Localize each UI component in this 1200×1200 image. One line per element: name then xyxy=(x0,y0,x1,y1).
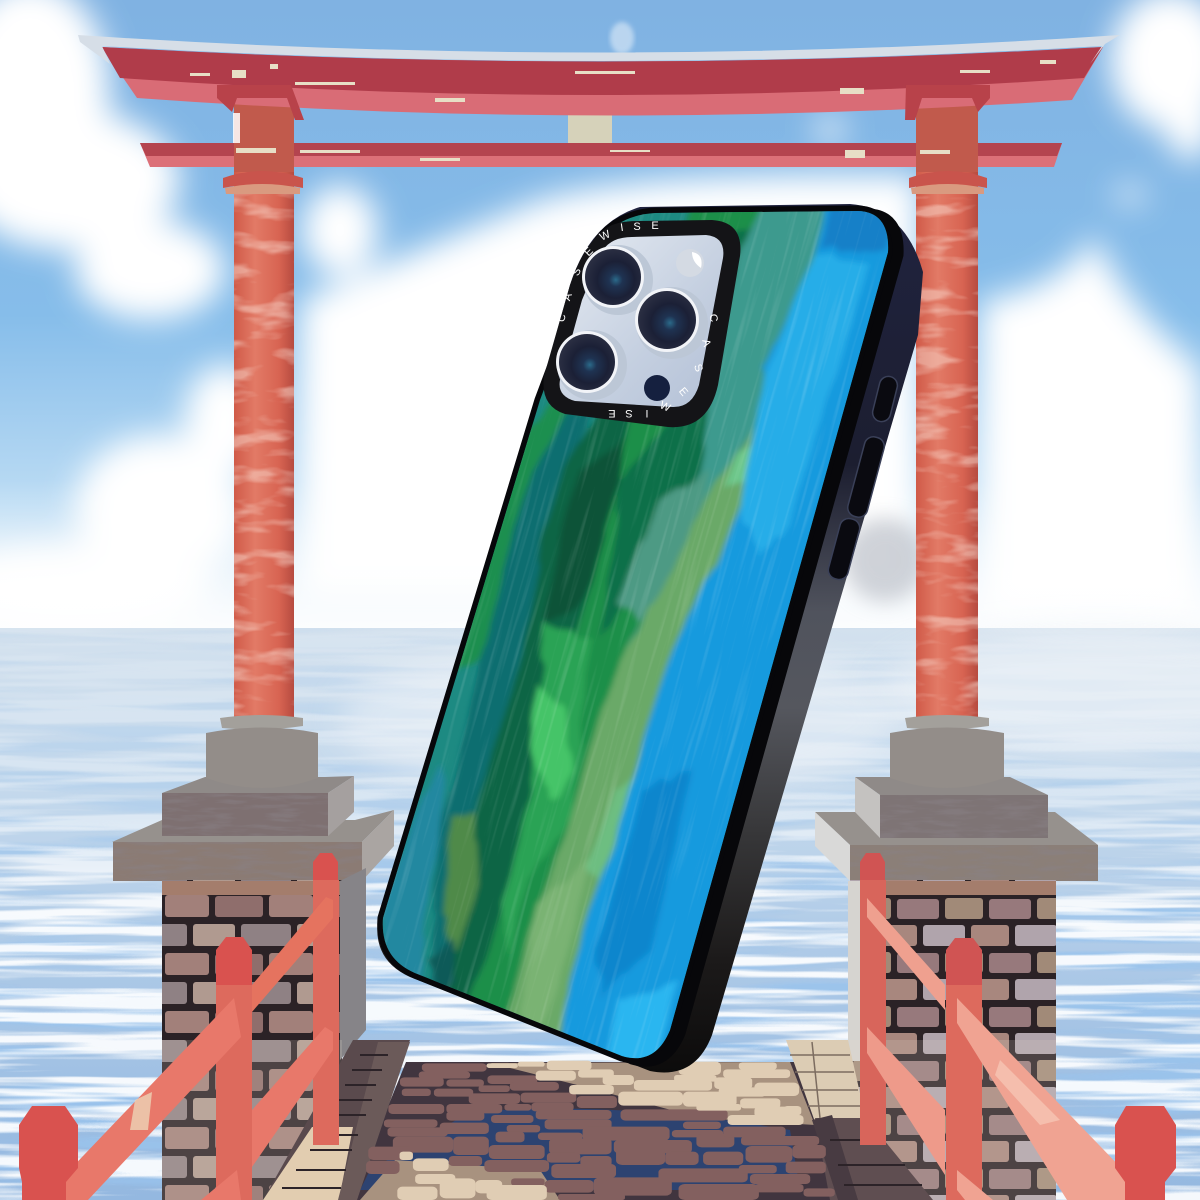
roof edge xyxy=(78,35,1120,64)
wet paving base xyxy=(350,1062,850,1200)
brand lettering: S xyxy=(570,266,584,278)
upper beam xyxy=(102,47,1103,116)
left stone base xyxy=(112,715,394,881)
sensor xyxy=(644,375,670,401)
puddles xyxy=(360,1109,800,1190)
right railing xyxy=(860,853,1176,1200)
left pillar xyxy=(233,100,294,718)
brand lettering: A xyxy=(699,338,713,349)
side buttons xyxy=(826,375,899,582)
lower left blue-teal xyxy=(380,760,441,990)
camera module xyxy=(543,220,740,427)
brand lettering: E xyxy=(676,385,690,399)
left curb xyxy=(263,1040,410,1200)
brand lettering xyxy=(555,220,720,419)
case body and bumper xyxy=(377,204,923,1072)
lens: top xyxy=(582,245,653,315)
brand lettering: I xyxy=(620,222,624,234)
lower rail xyxy=(867,1027,945,1175)
sage stripe xyxy=(504,428,758,1034)
right stone base xyxy=(815,715,1098,881)
brand lettering: E xyxy=(608,407,616,419)
clouds xyxy=(0,0,1200,635)
sunlit paving xyxy=(490,1062,815,1125)
brand lettering: C xyxy=(706,313,720,323)
lower rail, near part xyxy=(957,1170,993,1200)
near post xyxy=(946,938,982,1200)
black inner rim xyxy=(383,211,898,1061)
brand lettering: I xyxy=(645,407,649,419)
torii gate xyxy=(78,35,1120,718)
brand lettering: S xyxy=(633,221,641,233)
lower rail, near part xyxy=(201,1170,241,1200)
top rail, near part xyxy=(957,998,1128,1200)
central strut xyxy=(568,104,612,144)
brand lettering: E xyxy=(651,220,659,232)
sky xyxy=(0,0,1200,630)
far post xyxy=(860,853,886,1145)
near post xyxy=(216,937,252,1200)
upper teal stripe xyxy=(694,211,827,500)
end post xyxy=(19,1106,78,1200)
brand lettering: A xyxy=(561,291,575,302)
olive patches xyxy=(440,815,477,950)
dark teal stripe xyxy=(430,410,590,985)
lens: right xyxy=(635,287,708,359)
green stripe xyxy=(468,212,762,1011)
blue stripe xyxy=(555,195,900,1070)
canvas texture xyxy=(384,211,874,1058)
top rail, far part xyxy=(252,897,333,1012)
brand lettering: W xyxy=(658,399,673,415)
brand lettering: C xyxy=(555,313,569,323)
right curb xyxy=(786,1040,933,1200)
left railing xyxy=(19,853,339,1200)
left collars and cap xyxy=(217,85,304,194)
right pillar xyxy=(916,100,978,718)
top rail, far part xyxy=(867,898,945,1010)
top rail, near part xyxy=(60,998,241,1200)
lower beam xyxy=(140,143,1062,167)
end post xyxy=(1115,1106,1176,1200)
camera ring xyxy=(543,220,740,427)
left brick pier xyxy=(162,868,366,1200)
lens: bottom xyxy=(556,330,627,400)
lower rail xyxy=(252,1027,333,1167)
cobblestones xyxy=(366,1061,835,1200)
brand lettering: S xyxy=(625,407,633,419)
stone path xyxy=(263,1040,933,1200)
paint chips xyxy=(190,60,1056,161)
brand lettering: E xyxy=(582,245,596,259)
flash xyxy=(676,249,704,277)
camera plate xyxy=(560,235,723,407)
brand lettering: S xyxy=(691,362,705,374)
upper left green xyxy=(430,380,590,680)
bright green patch xyxy=(500,620,590,960)
right brick pier xyxy=(848,880,1056,1200)
phone case xyxy=(377,204,923,1072)
right collars and cap xyxy=(905,85,990,194)
dark green stripe xyxy=(446,418,632,996)
painted artwork xyxy=(382,211,888,1058)
water xyxy=(0,628,1200,1200)
far post xyxy=(313,853,339,1145)
brand lettering: W xyxy=(598,228,613,244)
